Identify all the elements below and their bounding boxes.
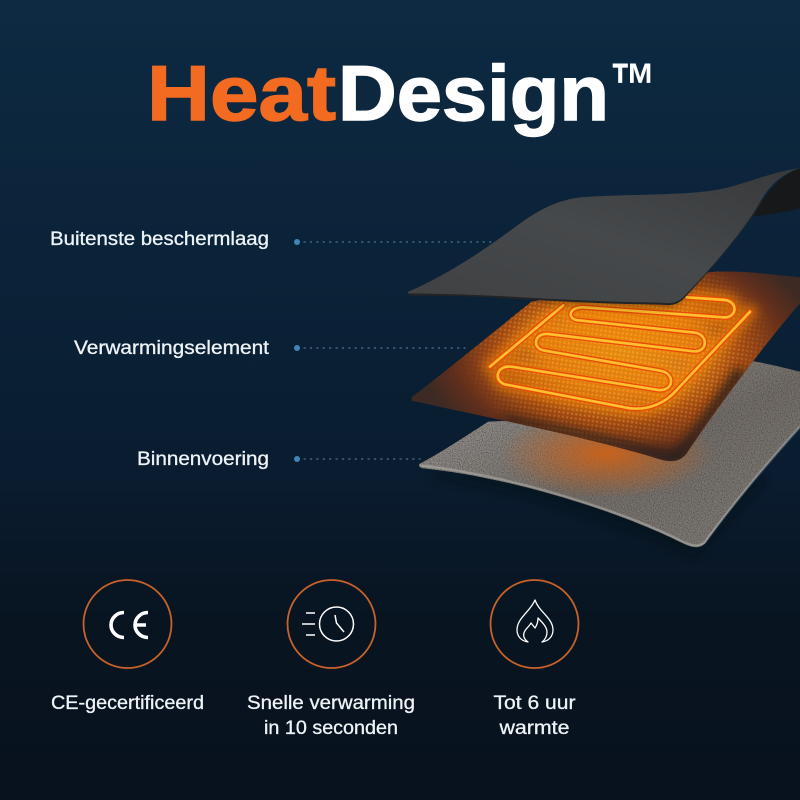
feature: fast heating (247, 580, 415, 739)
icon: fast clock (288, 580, 376, 668)
title (147, 49, 656, 137)
feature: CE certified (51, 580, 204, 714)
feature: six hours warmth: warmte (498, 718, 570, 739)
title: ™ (610, 51, 656, 120)
feature: fast heating: in 10 seconden (264, 718, 398, 739)
caption: Snelle verwarming (247, 693, 415, 714)
layered heating pad illustration (400, 168, 800, 557)
inner lining layer (419, 360, 800, 557)
icon: CE mark (84, 580, 172, 668)
caption: CE-gecertificeerd (51, 693, 204, 714)
caption: Tot 6 uur (494, 693, 576, 714)
heating element layer (412, 272, 800, 462)
label: Binnenvoering (137, 449, 420, 470)
title: Design (338, 49, 609, 137)
feature: six hours warmth (490, 580, 578, 739)
icon: flame (490, 580, 578, 668)
label: Verwarmingselement: Verwarmingselement (74, 338, 270, 359)
outer protective layer (408, 168, 800, 308)
label: Binnenvoering: Binnenvoering (137, 449, 269, 470)
heating wire (490, 297, 750, 409)
label: Verwarmingselement (74, 338, 465, 359)
title: Heat (147, 49, 336, 137)
label: Buitenste beschermlaag: Buitenste beschermlaag (50, 229, 269, 250)
label: Buitenste beschermlaag (50, 229, 520, 250)
